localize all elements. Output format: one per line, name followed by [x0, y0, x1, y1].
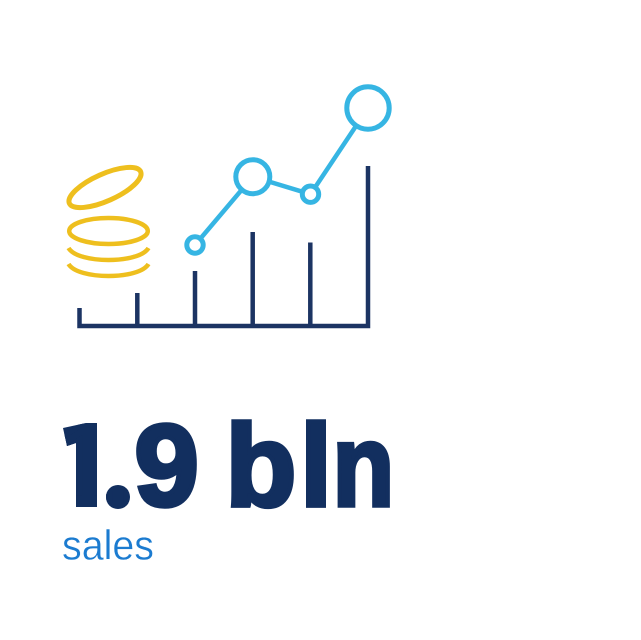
heading: 1.9 bln: bl [226, 400, 332, 530]
heading: 1.9 bln: n [332, 400, 394, 530]
label: sales: sales [62, 522, 154, 568]
icon: coins [64, 159, 148, 276]
heading: 1.9 bln [63, 419, 390, 510]
line chart [187, 87, 389, 253]
infographic: sales chart with coins [63, 84, 392, 560]
bar chart [80, 166, 368, 326]
heading: 1.9 bln: 1.9 [53, 400, 232, 530]
